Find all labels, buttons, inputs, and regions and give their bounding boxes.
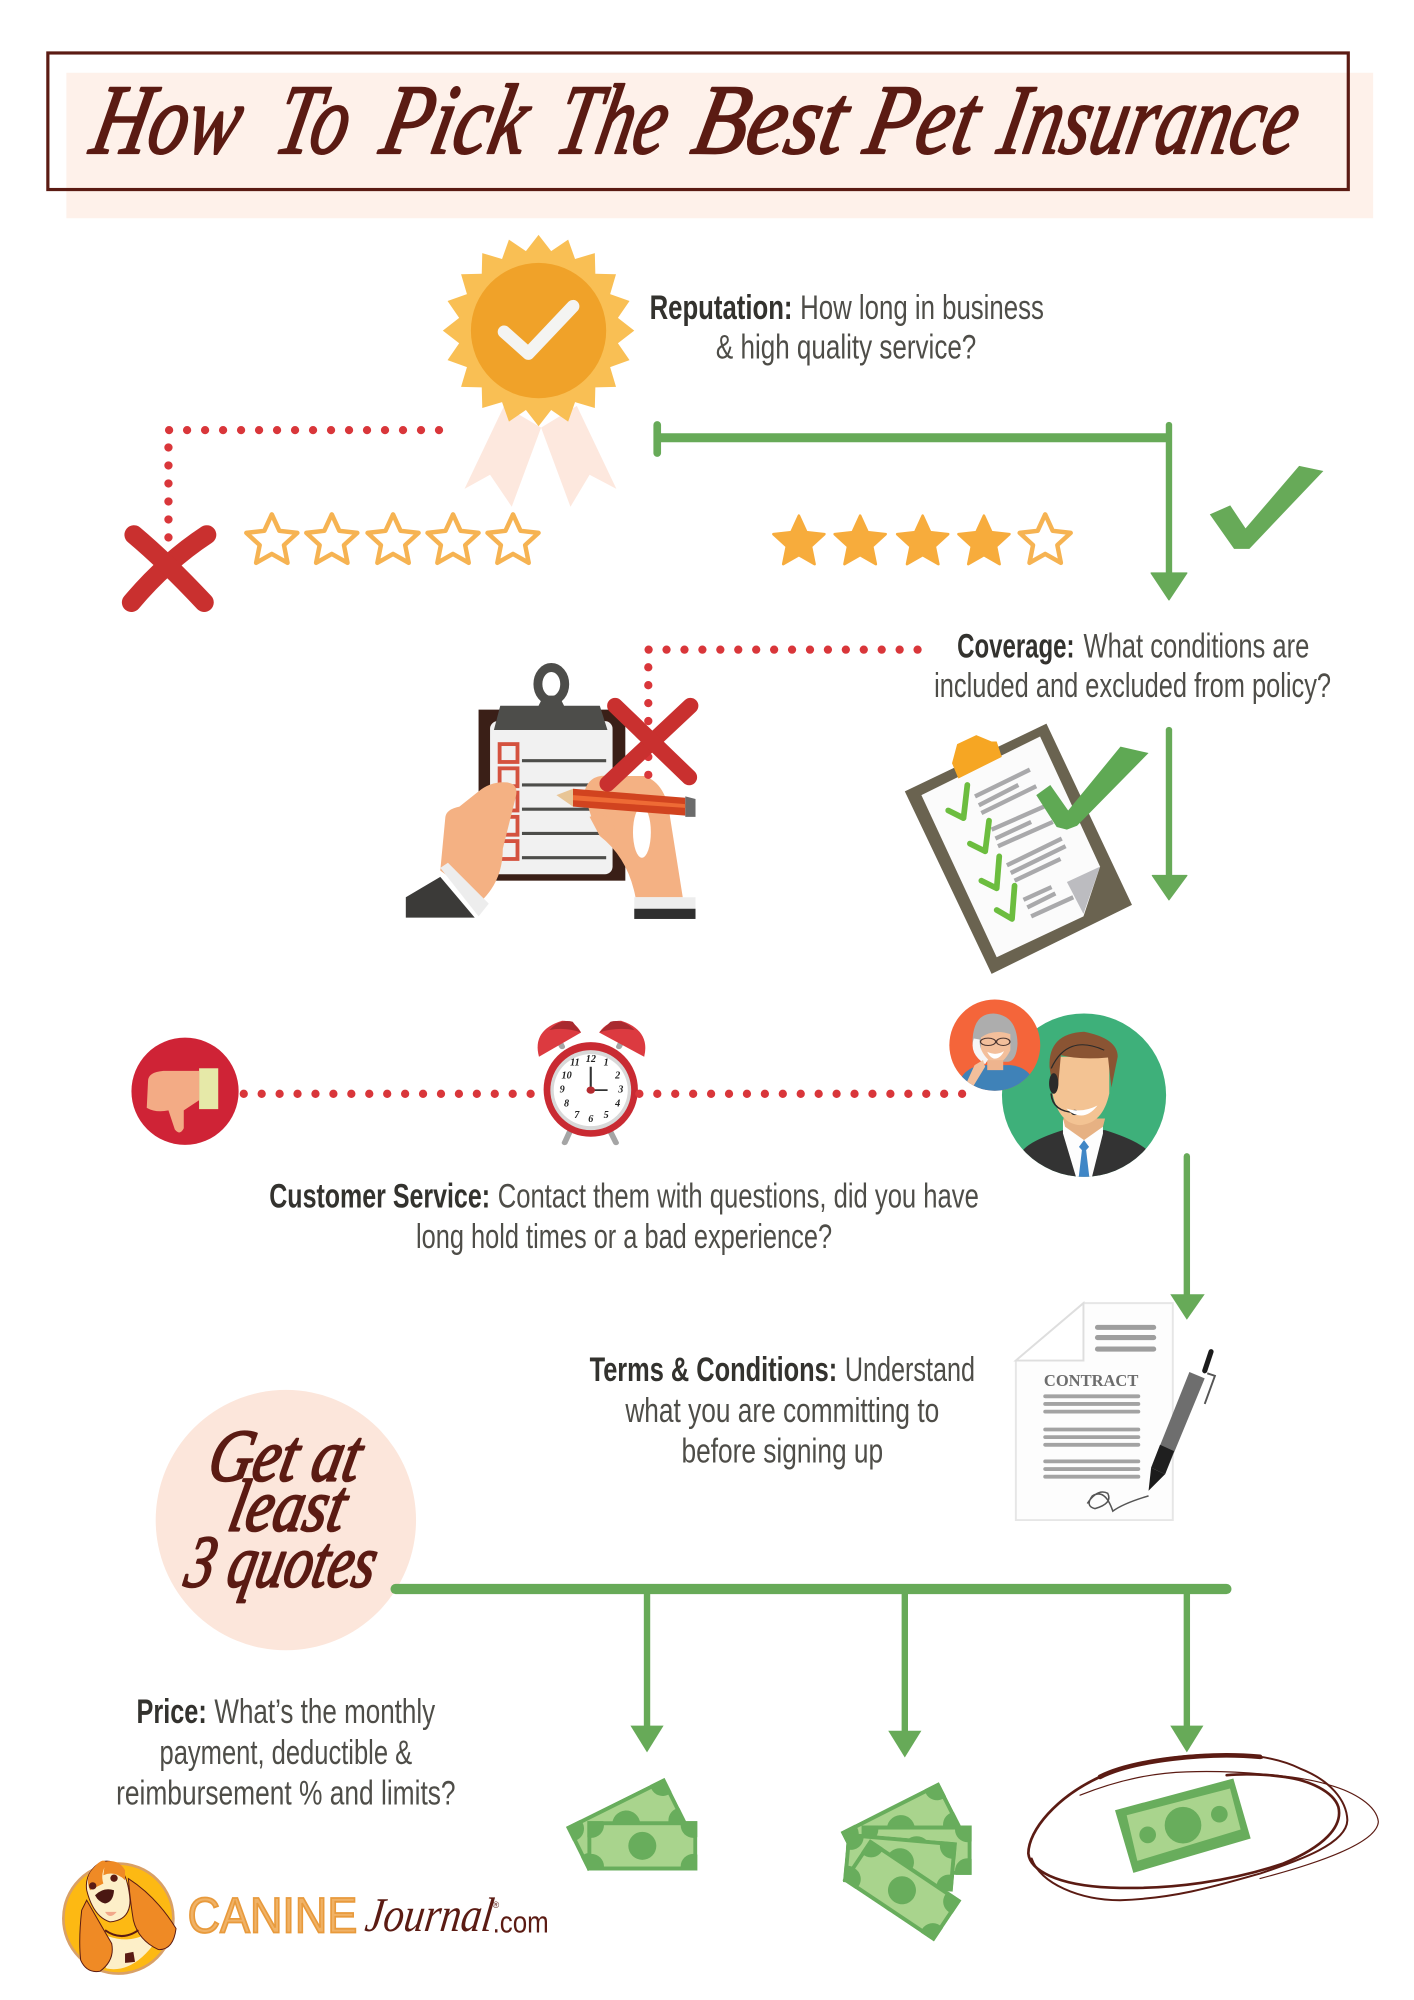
title: Pick [372, 64, 541, 175]
icon: alarm clock: 6 [588, 1114, 594, 1125]
icon: caller [949, 999, 1040, 1093]
title: Pet [856, 64, 992, 175]
dotted path: bad reputation [168, 430, 439, 539]
text: terms and conditions: Terms & Conditions: [590, 1351, 837, 1389]
icon: pencil [556, 789, 696, 836]
icon: green check [1210, 466, 1323, 549]
dotted path: customer service [244, 1091, 979, 1097]
logo: wordmark: Journal [362, 1888, 497, 1942]
dotted path: bad coverage [648, 650, 918, 781]
icon: pen [1149, 1352, 1215, 1491]
callout: get at least 3 quotes: least [222, 1465, 356, 1547]
icon: alarm clock: 4 [614, 1099, 620, 1110]
four filled stars and one empty [773, 514, 1071, 564]
title: Insurance [990, 64, 1310, 175]
text: reputation: How long in business [800, 289, 1044, 327]
logo: wordmark: CANINE [188, 1887, 357, 1943]
text: price [116, 1693, 456, 1813]
icon: customer service agent [1002, 1013, 1166, 1180]
arrow: coverage to customer service [1152, 730, 1187, 900]
arrows: quotes tree [396, 1589, 1226, 1757]
five empty stars [246, 514, 539, 563]
icon: clipboard with hands [406, 668, 696, 919]
logo: wordmark: .com [493, 1905, 549, 1939]
arrow: customer service to terms [1170, 1156, 1205, 1320]
icon: alarm clock: 7 [574, 1110, 580, 1121]
logo: wordmark: ® [493, 1900, 500, 1910]
icon: alarm clock: 1 [604, 1058, 609, 1069]
icon: alarm clock: 3 [617, 1085, 623, 1096]
text: coverage: Coverage: [957, 627, 1075, 665]
text: terms and conditions: Understand [845, 1351, 975, 1389]
icon: alarm clock: 8 [564, 1099, 569, 1110]
callout: get at least 3 quotes: Get at [202, 1415, 372, 1497]
scribbled circle [1028, 1755, 1378, 1900]
callout: get at least 3 quotes: 3 quotes [178, 1521, 385, 1603]
icon: alarm clock: 12 [586, 1054, 596, 1065]
icon: thumbs down [131, 1038, 239, 1145]
title: The [548, 64, 680, 175]
icon: alarm clock: 9 [560, 1085, 565, 1096]
title: Best [685, 64, 860, 175]
text: price: payment, deductible & [160, 1734, 412, 1772]
logo: wordmark [188, 1887, 549, 1943]
text: reputation: Reputation: [650, 289, 793, 327]
text: reputation [650, 289, 1044, 367]
icon: big green check [1036, 747, 1149, 830]
text: price: What’s the monthly [214, 1693, 436, 1731]
title banner [48, 53, 1373, 218]
title: How [82, 64, 254, 175]
icon: alarm clock: 10 [562, 1070, 572, 1081]
logo: Canine Journal dog [63, 1861, 176, 1974]
text: terms and conditions [590, 1351, 975, 1471]
text: price: reimbursement % and limits? [116, 1775, 456, 1813]
text: terms and conditions: before signing up [681, 1433, 883, 1471]
text: terms and conditions: what you are committing to [625, 1392, 939, 1430]
icon: alarm clock [538, 1021, 645, 1143]
text: price: Price: [137, 1693, 207, 1731]
icon: contract [1016, 1303, 1173, 1520]
icon: contract: CONTRACT [1044, 1371, 1139, 1390]
text: customer service: long hold times or a bad experience? [416, 1218, 832, 1256]
icon: red X on clipboard [607, 706, 690, 784]
arrow: reputation to coverage [657, 425, 1187, 600]
icon: money three [1115, 1779, 1251, 1873]
text: customer service: Contact them with questions, did you have [498, 1177, 979, 1215]
text: coverage: What conditions are [1083, 627, 1309, 665]
icon: red X [131, 535, 207, 602]
icon: money one [554, 1766, 706, 1883]
icon: approved clipboard [905, 724, 1132, 974]
icon: money two [829, 1771, 980, 1953]
icon: alarm clock: 2 [614, 1070, 620, 1081]
text: customer service: Customer Service: [269, 1177, 490, 1215]
callout: get at least 3 quotes [156, 1390, 416, 1650]
icon: alarm clock: 5 [604, 1110, 609, 1121]
icon: reputation medal [443, 235, 634, 507]
text: reputation: & high quality service? [716, 329, 976, 367]
title: To [267, 64, 362, 175]
text: coverage [934, 627, 1331, 705]
text: customer service [269, 1177, 979, 1256]
title [82, 64, 1310, 175]
icon: alarm clock: 11 [570, 1058, 580, 1069]
